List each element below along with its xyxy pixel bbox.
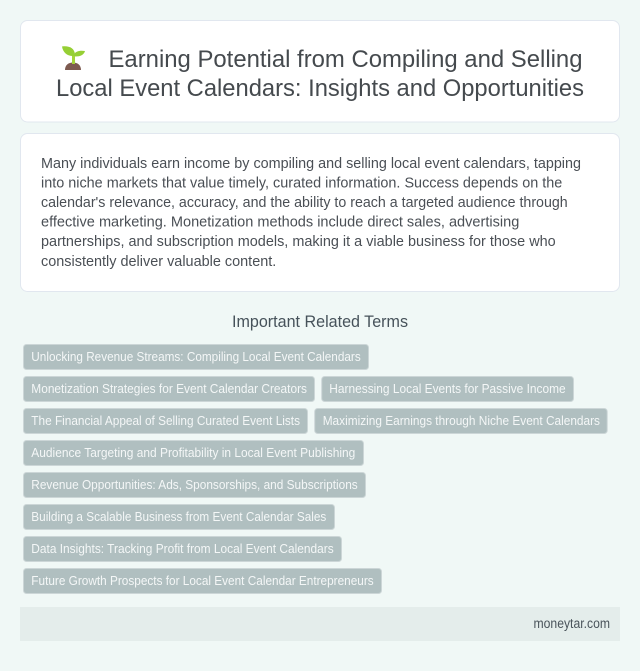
panel: title card — [20, 20, 620, 122]
tag — [24, 440, 364, 466]
footer credit: moneytar.com — [534, 616, 610, 631]
title: Local Event Calendars: Insights and Opportunities — [56, 75, 584, 102]
text block: description: effective marketing. Monetization methods include direct sales, advertising — [41, 214, 519, 231]
tag — [24, 568, 382, 594]
tag — [24, 344, 368, 370]
title: Earning Potential from Compiling and Selling — [108, 46, 582, 73]
tag — [24, 536, 342, 562]
text block: description: partnerships, and subscription models, making it a viable business for those who — [41, 233, 556, 250]
tag — [24, 408, 308, 434]
tag — [24, 504, 334, 530]
tag — [322, 376, 574, 402]
icon: seedling — [62, 46, 85, 70]
text block: description: consistently deliver valuable content. — [41, 253, 276, 270]
text block: description: Many individuals earn income by compiling and selling local event calendars, tapping — [41, 155, 581, 172]
text block: description — [41, 155, 581, 270]
tag — [315, 408, 607, 434]
tag: Data Insights: Tracking Profit from Local Event Calendars — [31, 541, 334, 556]
footer — [20, 607, 620, 641]
tag — [24, 376, 314, 402]
tag — [24, 472, 366, 498]
title — [56, 46, 584, 102]
tag: Unlocking Revenue Streams: Compiling Local Event Calendars — [31, 349, 361, 364]
tag: Maximizing Earnings through Niche Event Calendars — [323, 413, 600, 428]
text block: description: calendar's relevance, accuracy, and the ability to reach a targeted audience through — [41, 194, 568, 211]
tag: Revenue Opportunities: Ads, Sponsorships, and Subscriptions — [31, 477, 358, 492]
panel: description — [20, 134, 620, 292]
tag: Monetization Strategies for Event Calendar Creators — [31, 381, 307, 396]
tag: Future Growth Prospects for Local Event Calendar Entrepreneurs — [31, 573, 374, 588]
tag: Harnessing Local Events for Passive Income — [329, 381, 566, 396]
heading: important related terms: Important Related Terms — [232, 313, 408, 331]
text block: description: into niche markets that value timely, curated information. Success depends on the — [41, 174, 562, 192]
tag: The Financial Appeal of Selling Curated Event Lists — [31, 413, 300, 428]
tag: Audience Targeting and Profitability in Local Event Publishing — [31, 445, 355, 460]
panel: related term tags — [24, 344, 607, 594]
tag: Building a Scalable Business from Event Calendar Sales — [31, 509, 327, 524]
